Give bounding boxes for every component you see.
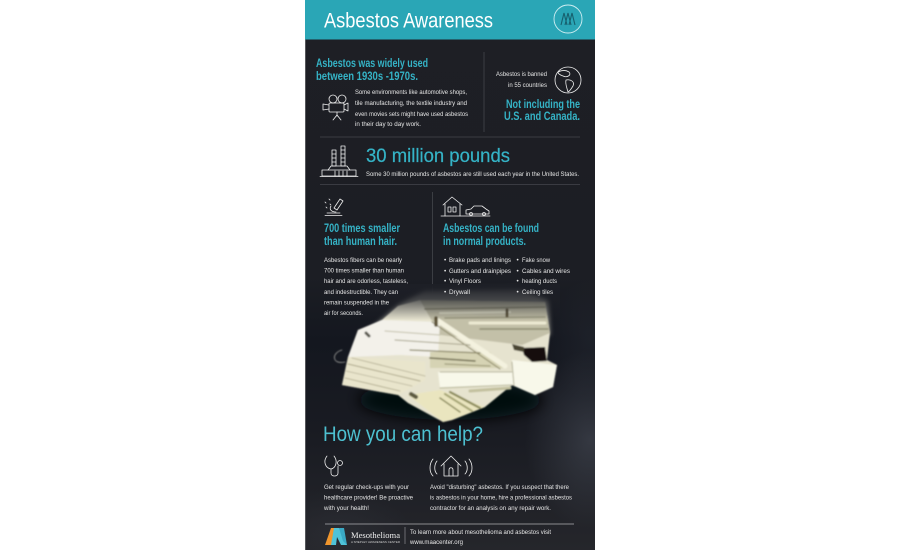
panel: ban bbox=[496, 67, 581, 123]
list: products left: Drywall bbox=[449, 289, 470, 296]
list: products left: • bbox=[444, 257, 446, 264]
panel: history bbox=[316, 58, 468, 128]
text: learn more: www.maacenter.org bbox=[409, 539, 463, 546]
text: fibers: 700 times smaller than human bbox=[324, 268, 404, 274]
text: environments: even movies sets might have used asbestos bbox=[355, 111, 468, 118]
list: products right: • bbox=[516, 268, 519, 275]
list: products left: Vinyl Floors bbox=[449, 278, 481, 285]
heading: 700 times smaller: 700 times smaller bbox=[324, 223, 400, 235]
text: learn more bbox=[409, 529, 551, 546]
list: products right: • bbox=[516, 289, 519, 296]
icon: factory bbox=[320, 146, 358, 176]
panel: how you can help bbox=[323, 423, 572, 512]
icon: stethoscope bbox=[325, 456, 342, 476]
icon: house with waves bbox=[430, 456, 472, 476]
logo: Mesothelioma: A SHEPLEY AWARENESS CENTER bbox=[351, 541, 400, 544]
icon: globe bbox=[555, 67, 581, 93]
heading: widely used: between 1930s -1970s. bbox=[316, 71, 418, 83]
text: fibers: hair and are odorless, tasteless, bbox=[324, 278, 408, 285]
text: banned countries: Asbestos is banned bbox=[496, 71, 547, 78]
text: pounds detail: Some 30 million pounds of asbestos are still used each year in the United States. bbox=[366, 171, 579, 178]
list: products left: Gutters and drainpipes bbox=[449, 268, 511, 275]
text: check-ups: healthcare provider! Be proactive bbox=[324, 494, 413, 502]
list: products right: Fake snow bbox=[522, 257, 550, 264]
text: environments bbox=[355, 89, 468, 128]
text: disturbing: is asbestos in your home, hire a professional asbestos bbox=[430, 494, 572, 502]
list: products right: heating ducts bbox=[522, 278, 557, 285]
logo: Mesothelioma bbox=[325, 528, 400, 545]
heading: not including: Not including the bbox=[506, 99, 580, 111]
text: banned countries: in 55 countries bbox=[508, 82, 547, 89]
text: disturbing bbox=[430, 484, 572, 512]
text: disturbing: contractor for an analysis on any repair work. bbox=[430, 505, 551, 512]
list: products right bbox=[516, 257, 570, 296]
text: banned countries bbox=[496, 71, 547, 89]
text: check-ups bbox=[323, 484, 413, 512]
logo: Mesothelioma: Mesothelioma bbox=[351, 530, 400, 540]
icon: house and car bbox=[441, 197, 490, 216]
heading: how you can help: How you can help? bbox=[323, 423, 483, 446]
text: fibers: Asbestos fibers can be nearly bbox=[324, 257, 403, 264]
heading: normal products bbox=[443, 223, 539, 248]
list: products right: • bbox=[516, 278, 519, 285]
heading: normal products: in normal products. bbox=[443, 236, 526, 248]
list: products left: • bbox=[444, 278, 446, 285]
panel: 30 million pounds bbox=[320, 145, 579, 178]
text: environments: Some environments like automotive shops, bbox=[355, 89, 467, 96]
list: products left: • bbox=[444, 268, 446, 275]
icon: microscope bbox=[325, 199, 343, 216]
text: fibers: remain suspended in the bbox=[324, 300, 389, 306]
text: fibers: and indestructible. They can bbox=[324, 289, 398, 296]
list: products left bbox=[444, 257, 511, 296]
heading: widely used bbox=[316, 58, 428, 83]
text: environments: in their day to day work. bbox=[355, 121, 421, 128]
header banner bbox=[305, 0, 595, 40]
heading: not including: U.S. and Canada. bbox=[504, 111, 580, 123]
list: products left: Brake pads and linings bbox=[449, 257, 511, 264]
heading: 700 times smaller bbox=[324, 223, 400, 248]
text: disturbing: Avoid "disturbing" asbestos. If you suspect that there bbox=[430, 484, 569, 491]
text: learn more: To learn more about mesothelioma and asbestos visit bbox=[410, 529, 551, 536]
panel: products bbox=[441, 197, 570, 296]
heading: not including bbox=[504, 99, 580, 123]
text: check-ups: Get regular check-ups with your bbox=[324, 484, 410, 491]
text: fibers: air for seconds. bbox=[324, 310, 363, 317]
photo: asbestos chunk bbox=[334, 284, 560, 422]
heading: 30 million pounds: 30 million pounds bbox=[366, 145, 510, 167]
heading: normal products: Asbestos can be found bbox=[443, 223, 539, 235]
icon: film camera bbox=[323, 95, 348, 120]
list: products right: • bbox=[516, 257, 519, 264]
footer bbox=[325, 527, 551, 546]
list: products right: Ceiling tiles bbox=[522, 289, 553, 296]
text: environments: tile manufacturing, the textile industry and bbox=[355, 100, 467, 107]
list: products right: Cables and wires bbox=[522, 268, 570, 275]
background panel bbox=[305, 40, 595, 550]
text: fibers bbox=[324, 257, 408, 317]
text: check-ups: with your health! bbox=[323, 505, 369, 512]
title: Asbestos Awareness bbox=[324, 10, 493, 32]
list: products left: • bbox=[444, 289, 446, 296]
heading: 700 times smaller: than human hair. bbox=[324, 236, 397, 248]
heading: widely used: Asbestos was widely used bbox=[316, 58, 428, 70]
panel: fiber size bbox=[324, 199, 408, 317]
icon: header logo bbox=[554, 5, 582, 33]
